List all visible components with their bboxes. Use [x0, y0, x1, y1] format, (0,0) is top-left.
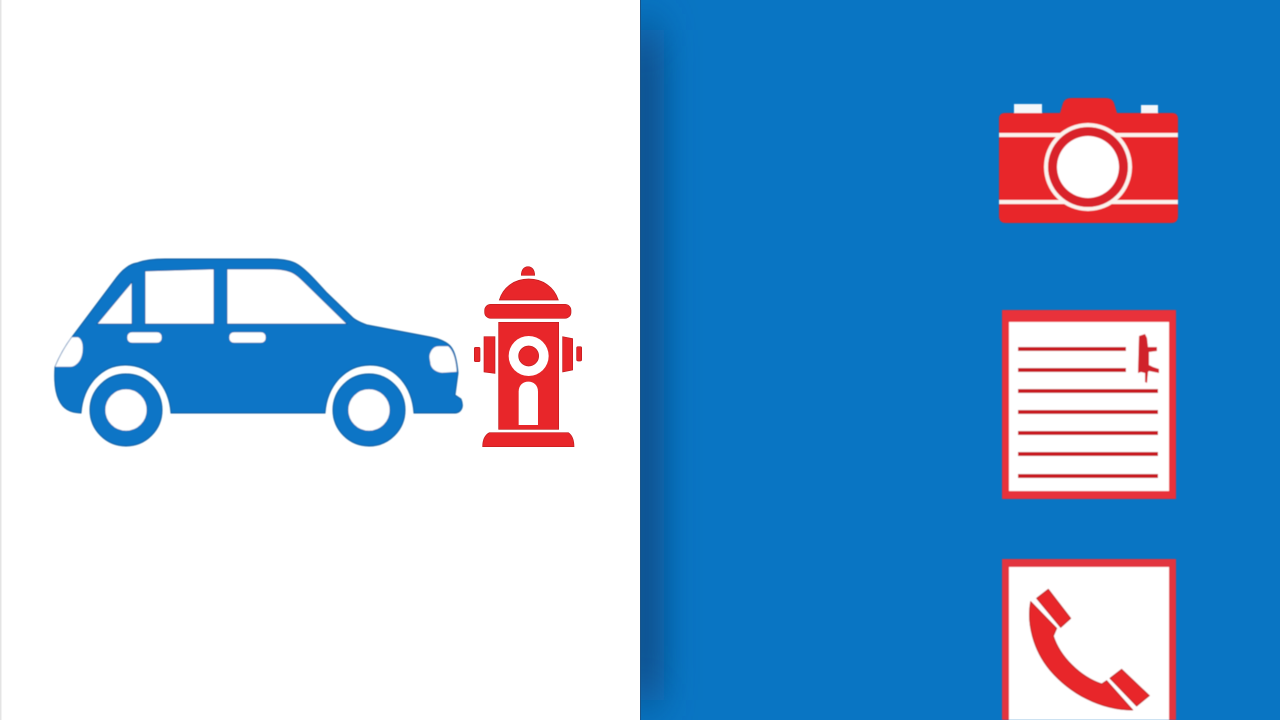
icon: red-framed document: [1002, 310, 1176, 499]
icon: red camera: [999, 98, 1178, 223]
icon: red fire hydrant: [474, 267, 582, 447]
icon: red-framed telephone: [1002, 559, 1176, 720]
car lights: [55, 337, 457, 373]
panel: left white scene: [0, 0, 640, 720]
camera lens: [1044, 123, 1132, 211]
hydrant cap: [521, 267, 535, 275]
icon: blue car: [55, 259, 462, 446]
panel: right blue: [622, 0, 1280, 720]
hydrant base: [483, 433, 574, 447]
camera buttons: [1014, 104, 1158, 113]
camera body: [999, 98, 1178, 223]
hydrant barrel: [499, 322, 559, 429]
document text lines: [1018, 347, 1158, 478]
car windows: [97, 269, 347, 324]
car body: [55, 259, 462, 413]
rear wheel: [90, 374, 162, 446]
hydrant side valves: [484, 337, 495, 373]
camera stripes: [999, 133, 1178, 204]
document signature mark: [1138, 334, 1159, 383]
telephone handset: [1030, 589, 1149, 710]
front wheel: [333, 374, 405, 446]
door handles: [127, 332, 266, 343]
